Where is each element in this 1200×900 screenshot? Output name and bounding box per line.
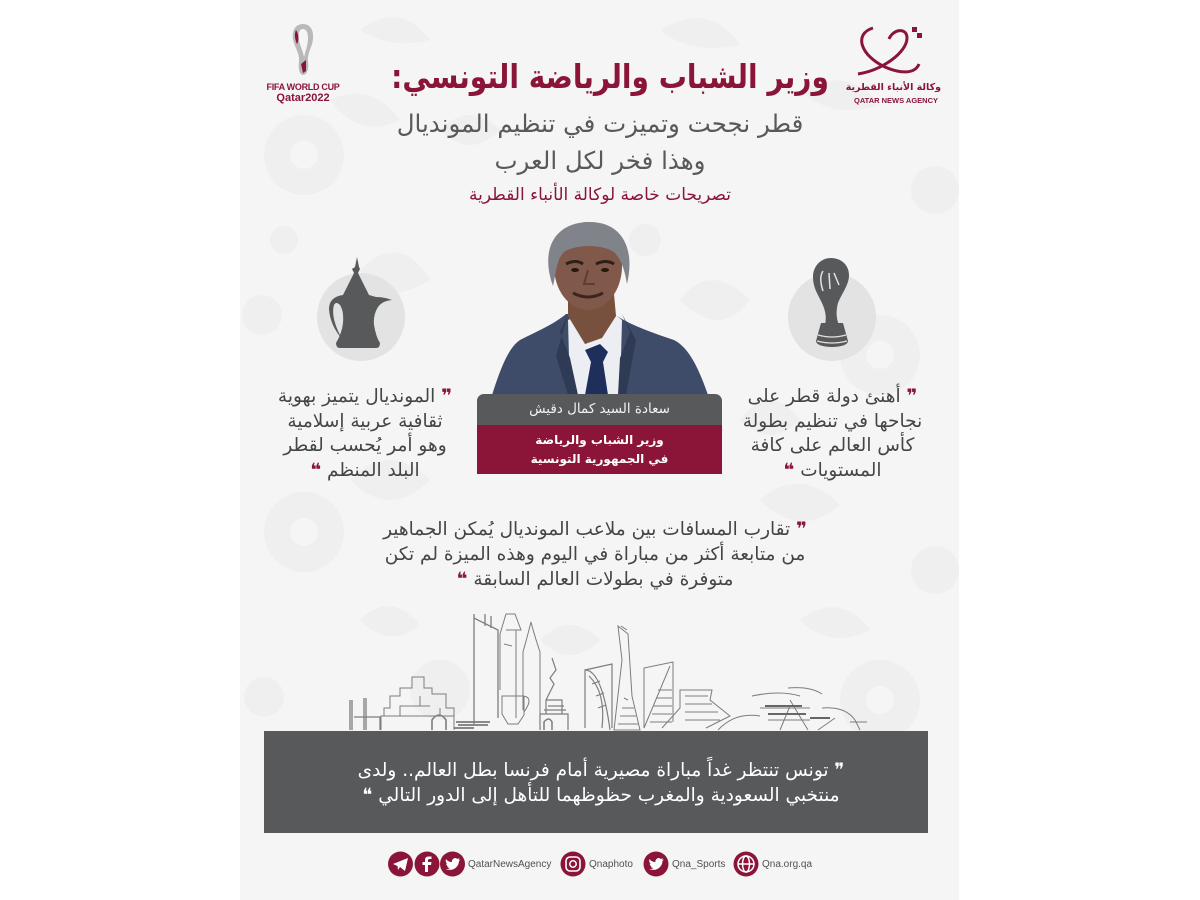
- banner text: منتخبي السعودية والمغرب حظوظهما للتأهل إلى الدور التالي ❝: [362, 785, 840, 806]
- subtitle: قطر نجحت وتميزت في تنظيم المونديال: [397, 109, 803, 138]
- social footer: [388, 852, 812, 876]
- logo: Qatar News Agency: [846, 26, 941, 105]
- label: Qna.org.qa: Qna.org.qa: [762, 859, 812, 870]
- quote: left: ثقافية عربية إسلامية: [287, 410, 443, 432]
- panel: poster background: [240, 0, 959, 900]
- role: [477, 425, 722, 474]
- icon: facebook: [414, 852, 440, 876]
- quote: middle: ❞ تقارب المسافات بين ملاعب المونديال يُمكن الجماهير: [383, 519, 807, 540]
- name: [477, 394, 722, 425]
- logo: Qatar News Agency: وكالة الأنباء القطرية: [846, 82, 941, 93]
- role: وزير الشباب والرياضة: [535, 433, 664, 447]
- quote: middle: من متابعة أكثر من مباراة في اليوم وهذه الميزة لم تكن: [385, 544, 805, 565]
- label: Qna_Sports: Qna_Sports: [672, 859, 725, 870]
- banner text: [358, 756, 844, 806]
- quote: left: [278, 386, 452, 480]
- banner: [264, 731, 928, 833]
- logo: Qatar News Agency: QATAR NEWS AGENCY: [854, 96, 938, 105]
- icon: twitter: [440, 852, 465, 876]
- subtitle: وهذا فخر لكل العرب: [494, 146, 706, 175]
- quote: left: وهو أمر يُحسب لقطر: [283, 435, 447, 456]
- label: Qnaphoto: Qnaphoto: [589, 859, 633, 870]
- quote: right: نجاحها في تنظيم بطولة: [743, 410, 922, 432]
- subtitle: [397, 109, 803, 175]
- logo: FIFA World Cup Qatar 2022: [267, 24, 340, 104]
- label: QatarNewsAgency: QatarNewsAgency: [468, 859, 551, 870]
- name plate: [477, 394, 722, 474]
- icon: world cup trophy: [788, 258, 876, 361]
- logo: FIFA World Cup Qatar 2022: FIFA WORLD CUP: [267, 82, 339, 92]
- logo: FIFA World Cup Qatar 2022: Qatar2022: [276, 92, 330, 104]
- icon: twitter sports: [644, 852, 668, 876]
- icon: coffee pot: [317, 257, 405, 361]
- quote: middle: متوفرة في بطولات العالم السابقة ❝: [457, 569, 733, 590]
- skyline illustration: [349, 614, 867, 730]
- title: وزير الشباب والرياضة التونسي:: [391, 57, 829, 96]
- quote: left: ❞ المونديال يتميز بهوية: [278, 386, 452, 407]
- quote: right: [743, 384, 922, 480]
- quote: right: ❞ أهنئ دولة قطر على: [748, 386, 917, 407]
- name: سعادة السيد كمال دقيش: [529, 401, 670, 417]
- quote: left: البلد المنظم ❝: [310, 460, 420, 480]
- source line: تصريحات خاصة لوكالة الأنباء القطرية: [469, 185, 731, 205]
- quote: right: المستويات ❝: [783, 460, 882, 480]
- quote: middle: [382, 519, 807, 590]
- role: في الجمهورية التونسية: [531, 452, 668, 466]
- portrait: minister: [492, 222, 708, 394]
- quote: right: كأس العالم على كافة: [751, 435, 914, 456]
- icon: telegram: [388, 852, 413, 876]
- banner text: ❞ تونس تنتظر غداً مباراة مصيرية أمام فرنسا بطل العالم.. ولدى: [358, 760, 844, 781]
- icon: instagram: [560, 852, 586, 876]
- icon: globe: [734, 852, 758, 876]
